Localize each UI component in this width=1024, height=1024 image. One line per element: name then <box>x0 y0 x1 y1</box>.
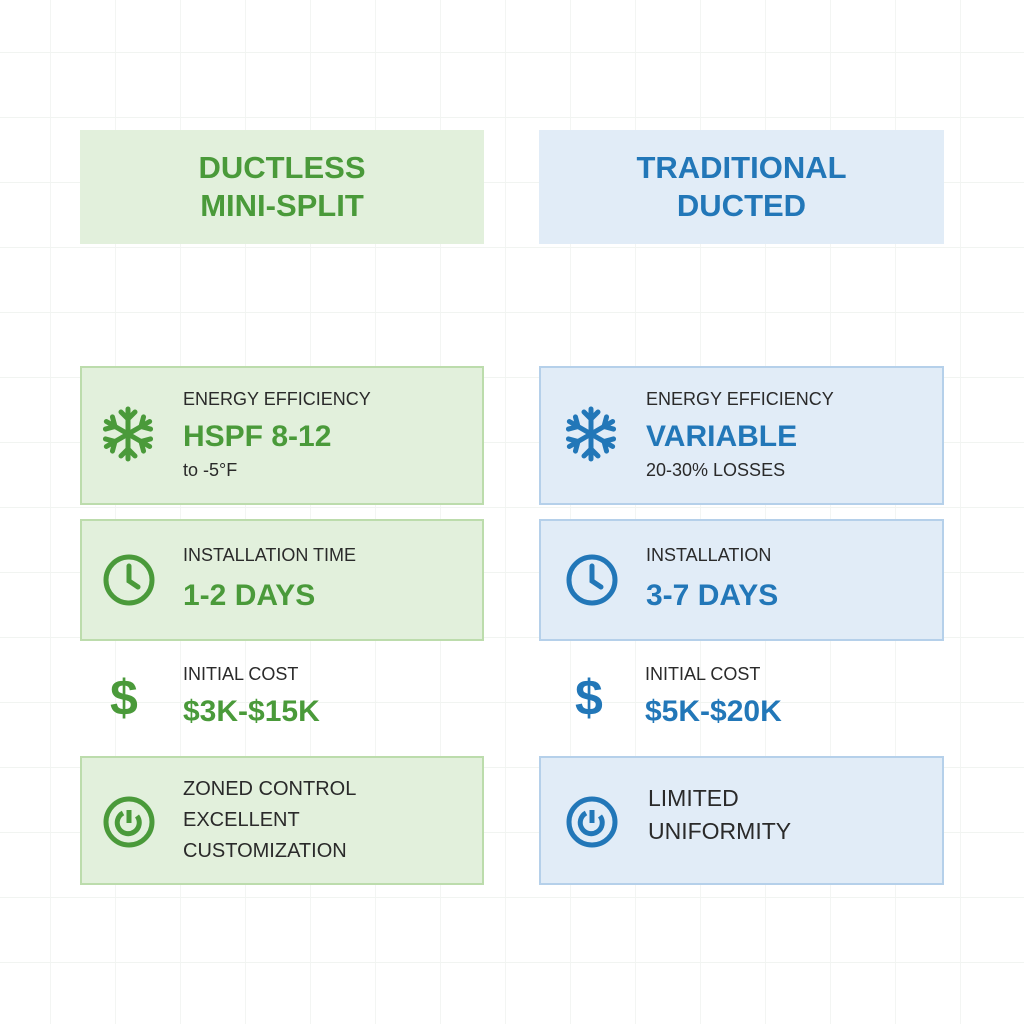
text: ENERGY EFFICIENCY <box>183 389 371 409</box>
panel: ductless zoned <box>80 756 484 885</box>
text: INSTALLATION <box>646 545 771 565</box>
panel: ductless install: 1-2 DAYS <box>183 579 315 612</box>
text: EXCELLENT <box>183 809 300 831</box>
row: traditional cost <box>575 664 782 728</box>
text <box>648 785 791 844</box>
text: LIMITED <box>648 785 739 811</box>
text: ENERGY EFFICIENCY <box>646 389 834 409</box>
panel: ductless energy <box>80 366 484 505</box>
text: ZONED CONTROL <box>183 778 356 800</box>
header: ductless: MINI-SPLIT <box>200 188 364 223</box>
panel: traditional energy <box>539 366 944 505</box>
icon: power dial <box>104 796 154 848</box>
header: ductless <box>80 130 484 244</box>
text: INSTALLATION TIME <box>183 545 356 565</box>
panel: traditional energy: 20-30% LOSSES <box>646 460 785 480</box>
panel: traditional energy: VARIABLE <box>646 420 797 453</box>
text: UNIFORMITY <box>648 818 791 844</box>
panel: traditional install <box>539 519 944 641</box>
row: traditional cost: $5K-$20K <box>645 695 782 728</box>
icon: clock <box>566 554 618 606</box>
icon: dollar: $ <box>110 670 138 726</box>
panel: ductless energy: to -5°F <box>183 460 237 480</box>
panel: traditional install: 3-7 DAYS <box>646 579 778 612</box>
header: traditional: DUCTED <box>677 188 806 223</box>
row: ductless cost <box>110 664 320 728</box>
header: traditional: TRADITIONAL <box>636 150 847 185</box>
text: INITIAL COST <box>183 664 298 684</box>
icon: snowflake <box>566 406 616 462</box>
text: CUSTOMIZATION <box>183 840 347 862</box>
icon: snowflake <box>102 406 153 462</box>
text: INITIAL COST <box>645 664 760 684</box>
panel: ductless energy: HSPF 8-12 <box>183 420 331 453</box>
header: ductless: DUCTLESS <box>198 150 366 185</box>
header: traditional <box>539 130 944 244</box>
panel: ductless install <box>80 519 484 641</box>
icon: dollar: $ <box>575 670 603 726</box>
text <box>183 778 356 862</box>
icon: clock <box>104 554 154 606</box>
icon: power dial <box>566 796 618 848</box>
panel: traditional limited <box>539 756 944 885</box>
row: ductless cost: $3K-$15K <box>183 695 320 728</box>
